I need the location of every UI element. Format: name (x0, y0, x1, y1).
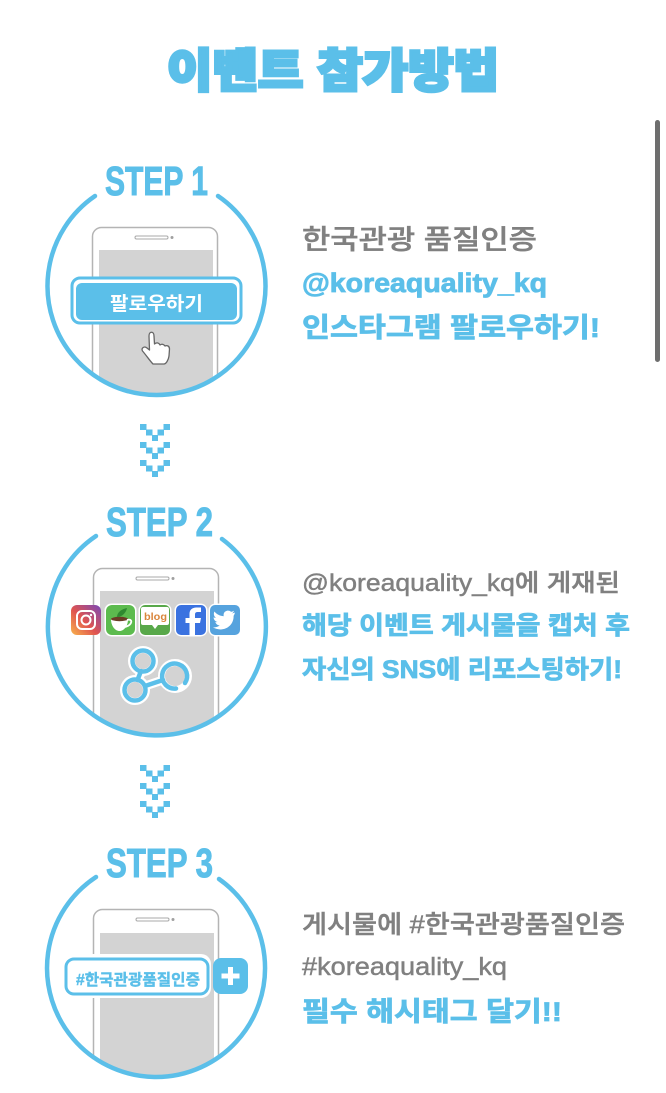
panel: step 2 (48, 499, 630, 751)
step 1 text (302, 225, 600, 343)
step 1 text: @koreaquality_kq (302, 268, 547, 298)
step 3 circle (47, 877, 265, 1077)
step 3 text (302, 911, 625, 1027)
icon: instagram (71, 605, 101, 635)
icon: plus button (213, 958, 248, 994)
step 3 text: 게시물에 #한국관광품질인증 (302, 911, 625, 939)
panel: step 3 (47, 840, 625, 1093)
step 3 phone (94, 910, 218, 1093)
arrow: step 2 to 3 (140, 765, 170, 818)
arrow: step 1 to 2 (140, 424, 170, 477)
scrollbar (655, 120, 660, 362)
icon: pointing hand (142, 332, 170, 364)
step 3 text: #koreaquality_kq (302, 953, 507, 981)
title: 이벤트 참가방법 (167, 35, 499, 101)
step 2 text: 해당 이벤트 게시물을 캡처 후 (302, 612, 630, 640)
follow button (72, 278, 241, 323)
step 3 heading: STEP 3 (106, 840, 213, 886)
icon: green cafe (104, 604, 136, 636)
step 2 text: 자신의 SNS에 리포스팅하기! (302, 656, 622, 684)
step 2 phone (94, 568, 218, 751)
step 1 text: 인스타그램 팔로우하기! (302, 313, 600, 343)
icon: share (124, 650, 188, 700)
step 3 text: 필수 해시태그 달기!! (302, 997, 562, 1027)
step 1 circle (48, 196, 266, 395)
icon: facebook (174, 604, 208, 636)
icon: blog: blog (144, 611, 167, 623)
follow button: 팔로우하기 (110, 293, 203, 315)
step 2 text: @koreaquality_kq에 게재된 (302, 570, 620, 597)
panel: step 1 (48, 158, 600, 410)
step 1 phone (92, 228, 218, 410)
step 2 circle (48, 536, 266, 735)
hashtag box: #한국관광품질인증 (76, 971, 200, 989)
step 1 heading: STEP 1 (105, 158, 208, 204)
icon: blog (138, 604, 172, 636)
hashtag box (62, 954, 211, 998)
icon: twitter (208, 604, 242, 636)
step 1 text: 한국관광 품질인증 (302, 225, 537, 255)
step 2 heading: STEP 2 (106, 499, 213, 545)
step 2 text (302, 570, 630, 684)
